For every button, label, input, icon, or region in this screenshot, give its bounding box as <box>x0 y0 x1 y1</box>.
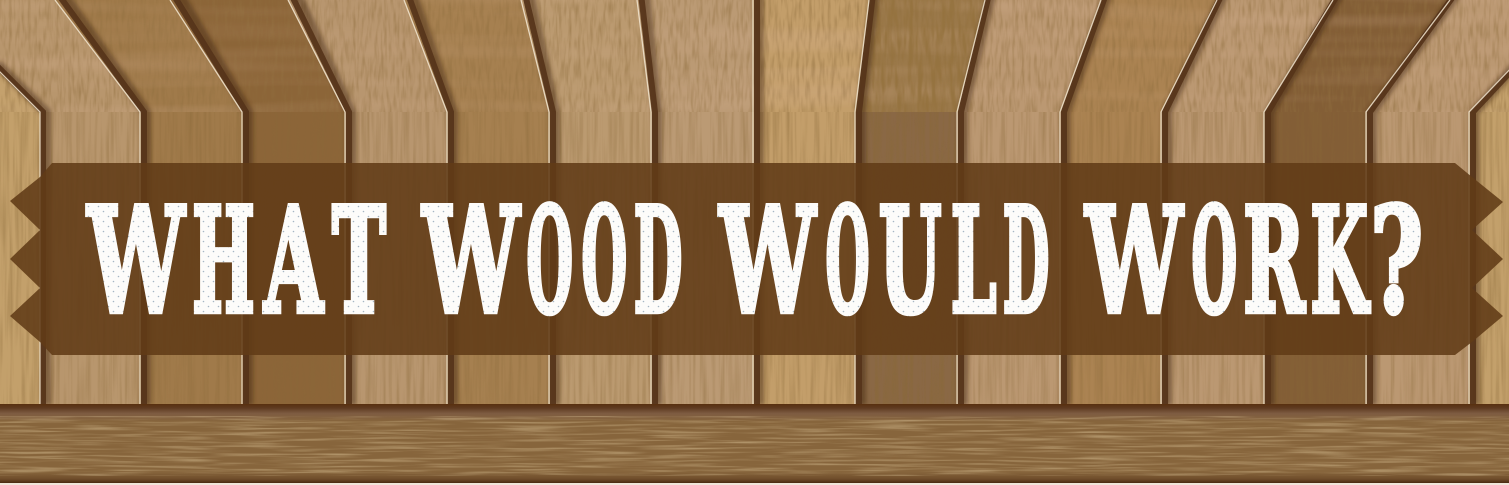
title banner <box>10 163 1503 355</box>
title text <box>86 176 1423 346</box>
word: WORK?: O <box>1191 176 1237 346</box>
word: WHAT: W <box>86 176 186 346</box>
shelf <box>0 404 1509 485</box>
wood colour bands upper <box>0 0 1509 112</box>
dark knotted grain on plank <box>867 0 977 112</box>
word: WOULD: O <box>825 176 870 346</box>
word: WOULD <box>718 176 1050 346</box>
word: WOOD: W <box>421 176 521 346</box>
word: WHAT: H <box>192 176 255 346</box>
word: WORK?: W <box>1084 176 1184 346</box>
word: WORK?: K <box>1310 176 1370 346</box>
title text: D <box>1003 176 1050 346</box>
dark streaks on lower plank <box>855 112 957 405</box>
word: WORK?: ? <box>1370 176 1423 346</box>
wood grain texture lower <box>0 112 1509 405</box>
word: WOOD: O <box>526 176 573 346</box>
word: WOULD: U <box>879 176 942 346</box>
word: WHAT: T <box>332 176 386 346</box>
word: WOULD: W <box>718 176 817 346</box>
word: WOOD <box>421 176 683 346</box>
word: WOOD: O <box>581 176 627 346</box>
word: WORK? <box>1084 176 1423 346</box>
word: WHAT: A <box>263 176 324 346</box>
word: WHAT <box>86 176 386 346</box>
wood grain texture upper <box>0 0 1509 112</box>
title text: D <box>634 176 683 346</box>
word: WORK?: R <box>1243 176 1306 346</box>
word: WOULD: L <box>951 176 997 346</box>
